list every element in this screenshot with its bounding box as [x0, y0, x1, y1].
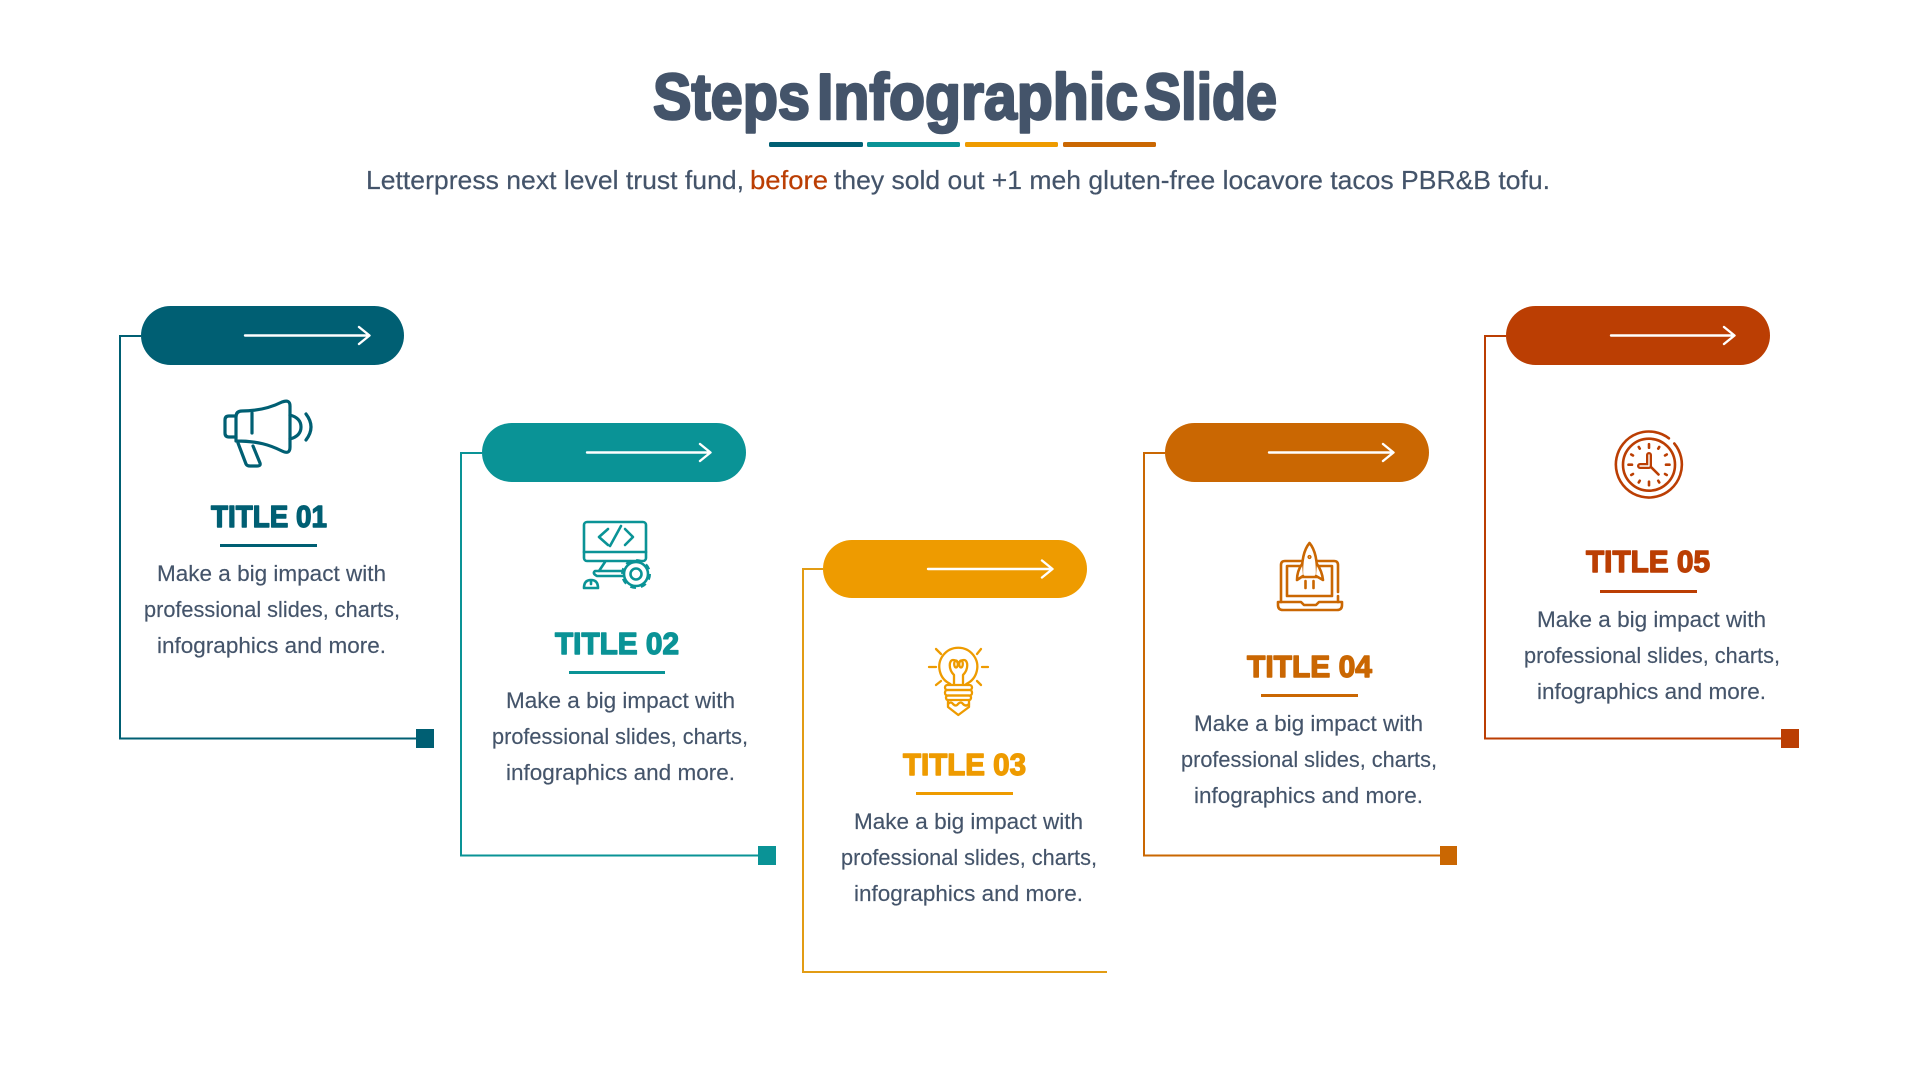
panel: step 05	[1485, 306, 1799, 748]
title: Slide	[1144, 60, 1277, 133]
description	[841, 809, 1097, 906]
header	[366, 60, 1550, 195]
heading underline	[569, 671, 665, 674]
pill with arrow	[141, 306, 404, 365]
description	[1181, 711, 1437, 808]
end marker	[1781, 729, 1799, 748]
description: infographics and more.	[157, 633, 386, 658]
heading underline	[220, 544, 317, 547]
description: professional slides, charts,	[841, 845, 1097, 870]
subtitle: Letterpress next level trust fund,	[366, 165, 744, 195]
description: infographics and more.	[1194, 783, 1423, 808]
heading: TITLE 05	[1586, 544, 1710, 579]
panel: step 03	[803, 540, 1107, 972]
title accent bars	[769, 142, 1156, 147]
panel: step 02	[461, 423, 776, 865]
description: Make a big impact with	[1537, 607, 1766, 632]
heading underline	[1600, 590, 1697, 593]
bracket line	[461, 453, 760, 856]
subtitle: before	[750, 165, 828, 195]
description: infographics and more.	[506, 760, 735, 785]
icon: computer with gear	[584, 522, 650, 588]
icon: clock	[1616, 432, 1682, 498]
description	[144, 561, 400, 658]
panel: step 04	[1144, 423, 1457, 865]
description	[1524, 607, 1780, 704]
bracket line	[1144, 453, 1445, 856]
end marker	[416, 729, 434, 748]
heading underline	[1261, 694, 1358, 697]
pill with arrow	[482, 423, 746, 482]
heading underline	[916, 792, 1013, 795]
description	[492, 688, 748, 785]
description: Make a big impact with	[506, 688, 735, 713]
heading: TITLE 04	[1247, 649, 1373, 684]
description: Make a big impact with	[157, 561, 386, 586]
icon: megaphone	[225, 401, 311, 466]
icon: light bulb pencil	[929, 648, 988, 715]
title	[653, 60, 1277, 133]
pill with arrow	[1165, 423, 1429, 482]
subtitle	[366, 165, 1550, 195]
bracket line	[120, 336, 420, 738]
end marker	[1440, 846, 1457, 865]
end marker	[758, 846, 776, 865]
description: Make a big impact with	[1194, 711, 1423, 736]
bracket line	[803, 569, 1107, 972]
heading: TITLE 02	[555, 626, 679, 661]
description: professional slides, charts,	[144, 597, 400, 622]
icon: rocket laptop	[1278, 543, 1342, 610]
description: Make a big impact with	[854, 809, 1083, 834]
title: Steps	[653, 60, 810, 133]
pill with arrow	[823, 540, 1087, 598]
description: infographics and more.	[1537, 679, 1766, 704]
description: professional slides, charts,	[1524, 643, 1780, 668]
panel: step 01	[120, 306, 434, 748]
bracket line	[1485, 336, 1785, 738]
title: Infographic	[817, 60, 1138, 133]
subtitle: they sold out +1 meh gluten-free locavore tacos PBR&B tofu.	[834, 165, 1550, 195]
pill with arrow	[1506, 306, 1770, 365]
heading: TITLE 03	[903, 747, 1026, 782]
description: professional slides, charts,	[492, 724, 748, 749]
description: infographics and more.	[854, 881, 1083, 906]
description: professional slides, charts,	[1181, 747, 1437, 772]
heading: TITLE 01	[211, 499, 327, 534]
